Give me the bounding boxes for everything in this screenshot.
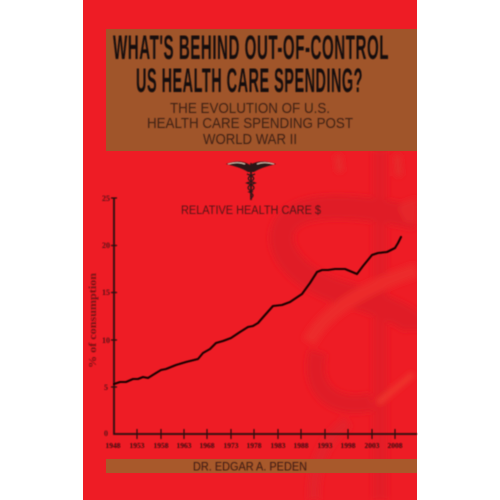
data line [114,237,401,384]
y axis tick labels: 10 [102,336,110,345]
x axis tick labels: 2008 [388,441,403,450]
x axis tick labels: 1953 [130,441,145,450]
x axis tick labels: 1948 [106,441,121,450]
line chart [87,194,417,450]
y axis title: % of consumption [87,273,99,368]
icon: caduceus [226,161,276,200]
y axis tick labels: 15 [102,288,110,297]
axes [114,198,417,434]
x axis tick labels: 2003 [364,441,380,450]
x axis ticks [137,429,395,439]
y axis tick labels [102,194,110,438]
x axis tick labels: 1993 [318,441,333,450]
x axis tick labels [106,441,403,450]
x axis tick labels: 1988 [294,441,309,450]
y axis ticks [111,198,117,387]
chart heading: RELATIVE HEALTH CARE $ [181,205,322,217]
x axis tick labels: 1983 [270,441,286,450]
x axis tick labels: 1978 [246,441,262,450]
x axis tick labels: 1963 [176,441,192,450]
x axis tick labels: 1973 [224,441,239,450]
background caduceus watermark [282,150,417,500]
subtitle: WORLD WAR II [203,131,297,148]
x axis tick labels: 1968 [200,441,215,450]
y axis tick labels: 0 [104,429,108,438]
subtitle: THE EVOLUTION OF U.S. [170,100,330,117]
y axis tick labels: 5 [104,383,108,392]
subtitle [147,100,353,148]
title [113,29,389,100]
book cover infographic [83,0,418,500]
x axis tick labels: 1998 [340,441,356,450]
y axis tick labels: 25 [102,194,110,203]
top title banner [106,29,417,151]
subtitle: HEALTH CARE SPENDING POST [147,115,353,132]
x axis tick labels: 1958 [154,441,169,450]
y axis tick labels: 20 [102,241,110,250]
author name: DR. EDGAR A. PEDEN [193,462,307,474]
author banner [106,459,417,474]
